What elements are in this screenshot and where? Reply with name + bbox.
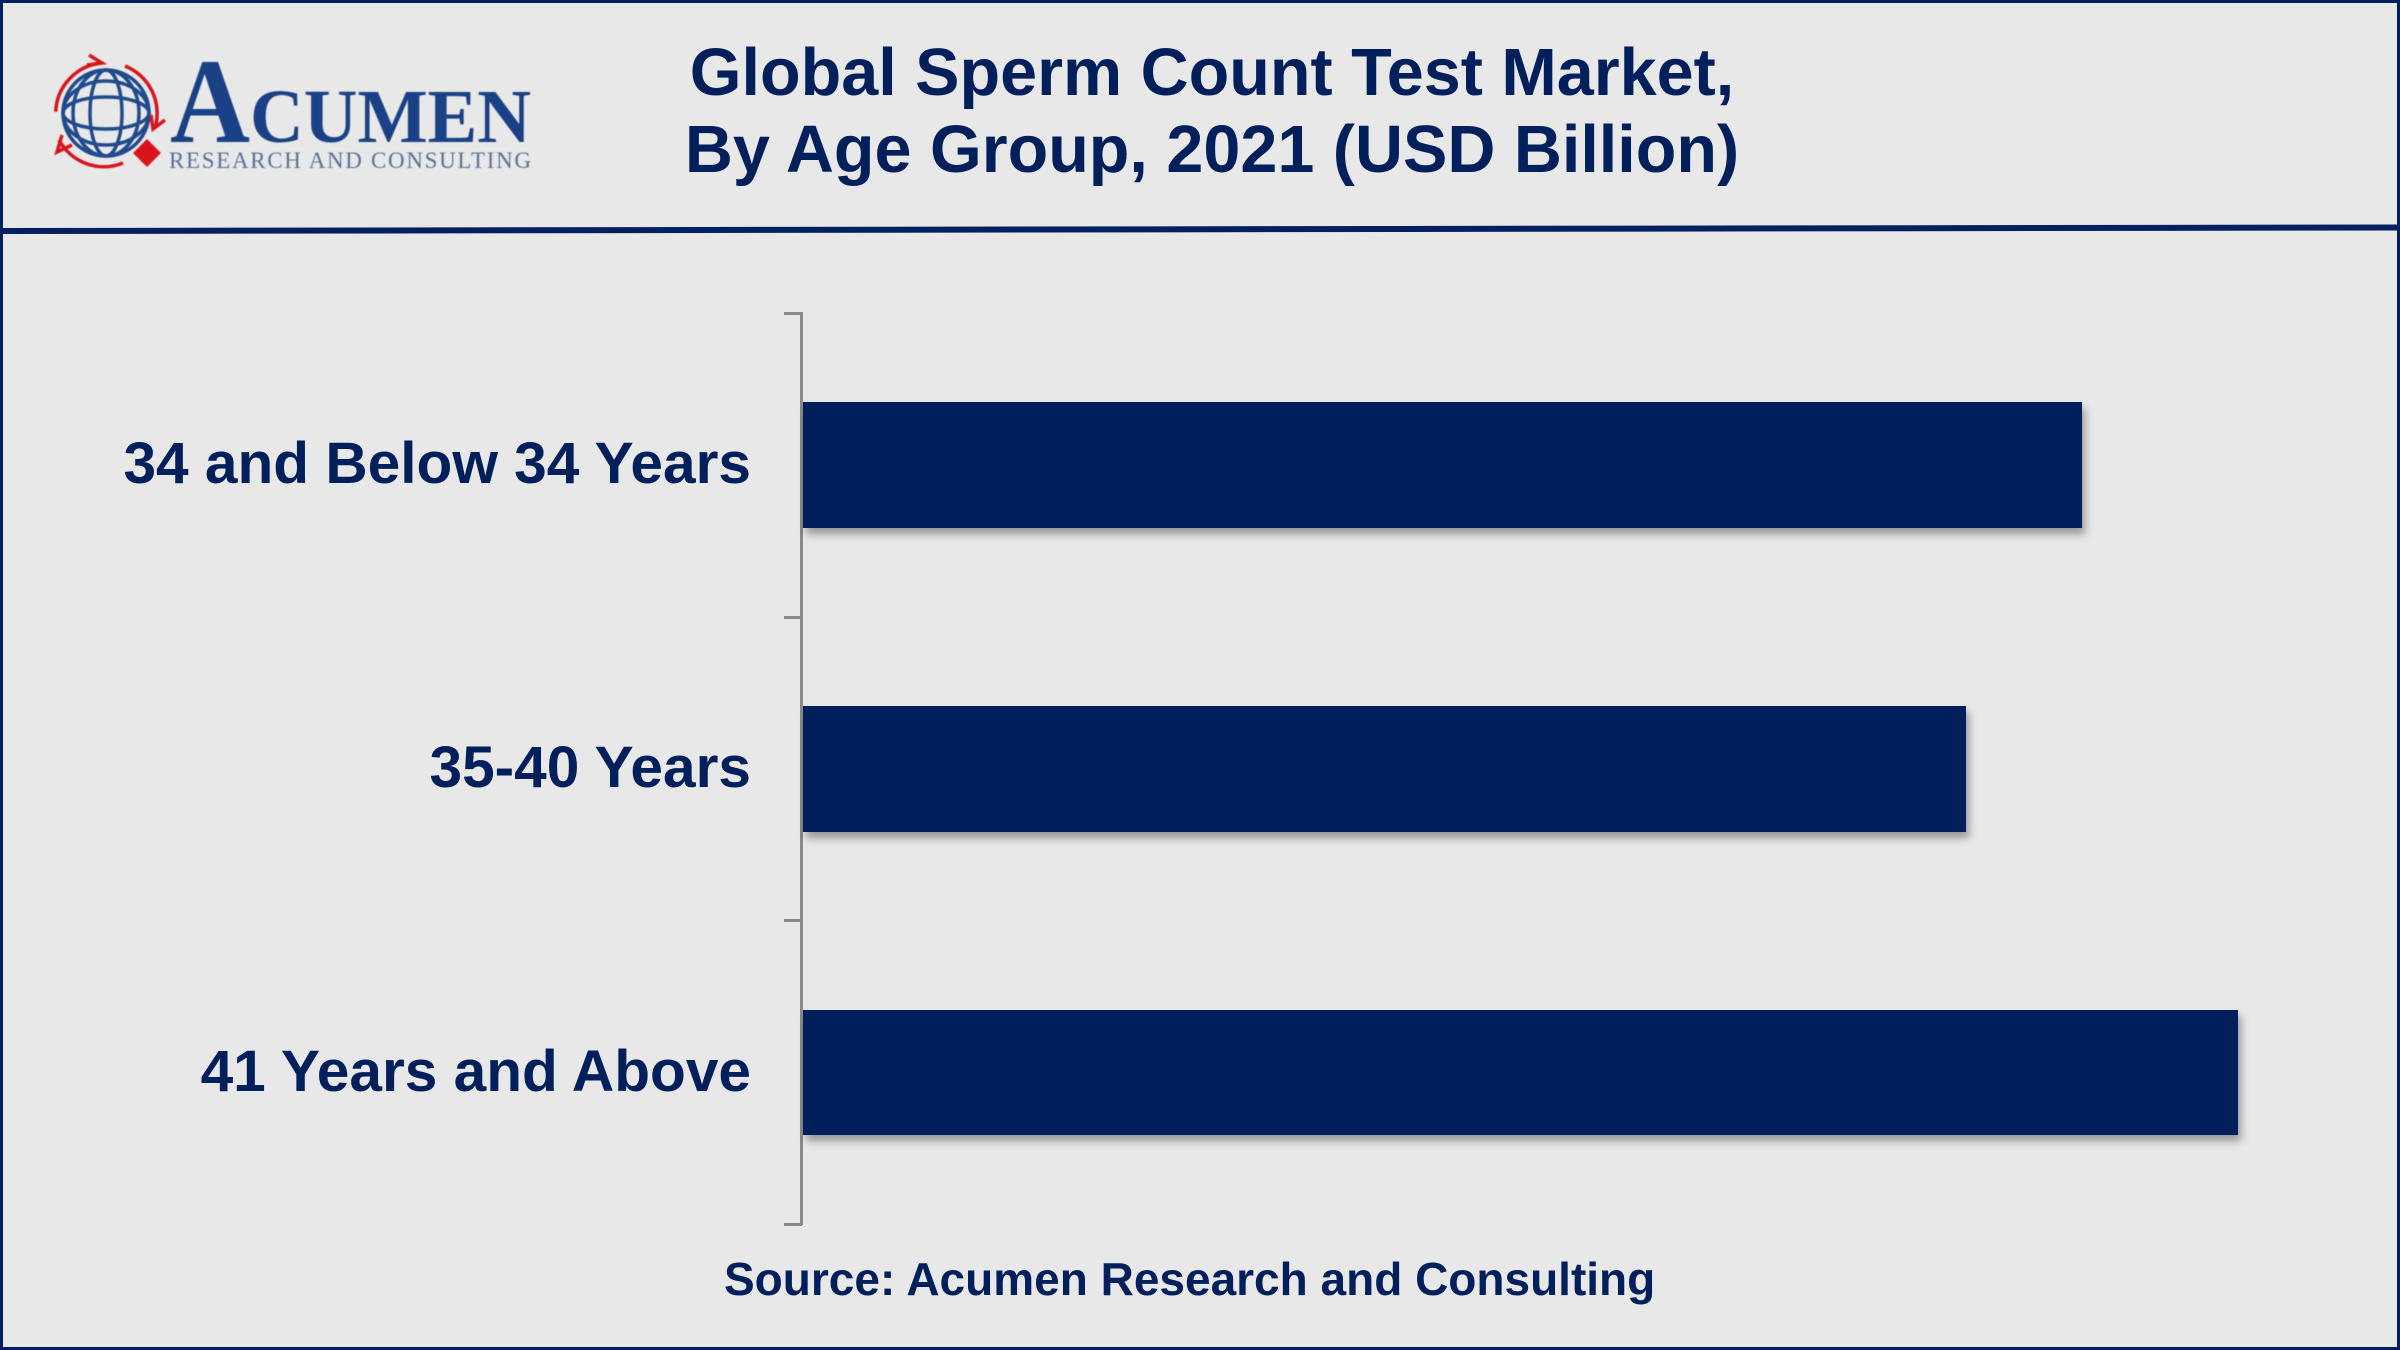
logo tagline: RESEARCH AND CONSULTING	[169, 148, 531, 173]
bar: 41 Years and Above	[803, 1010, 2238, 1135]
title: By Age Group, 2021 (USD Billion)	[685, 113, 1739, 187]
source note: Source: Acumen Research and Consulting	[724, 1253, 1655, 1305]
logo: Acumen Research and Consulting	[53, 35, 531, 173]
logo wordmark: A	[170, 35, 250, 169]
title	[685, 36, 1739, 187]
logo: Acumen Research and Consulting: CUMEN	[250, 75, 531, 159]
category label: 35-40 Years: 35-40 Years	[430, 735, 751, 800]
icon: red arrows and diamond	[56, 55, 165, 167]
title: Global Sperm Count Test Market,	[690, 36, 1734, 110]
bar: 35-40 Years	[803, 706, 1966, 832]
category label: 41 Years and Above: 41 Years and Above	[201, 1039, 751, 1104]
icon: globe	[63, 70, 149, 156]
header divider	[3, 224, 2397, 234]
bar chart	[123, 312, 2246, 1226]
bar: 34 and Below 34 Years	[803, 402, 2082, 528]
category label: 34 and Below 34 Years: 34 and Below 34 Years	[123, 431, 751, 496]
y axis	[784, 312, 803, 1226]
